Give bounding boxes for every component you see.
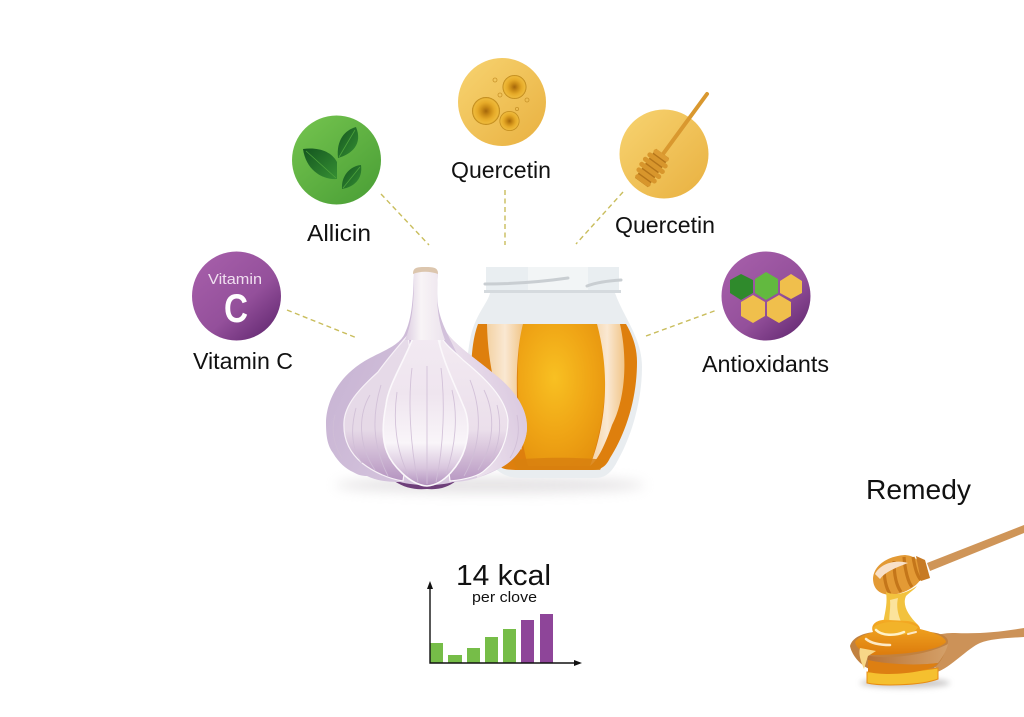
chart subtitle: per clove: per clove — [472, 589, 537, 606]
right middle clove — [440, 335, 508, 481]
spoon handle — [925, 628, 1024, 672]
honey core — [518, 324, 605, 466]
spoon bowl — [850, 632, 948, 671]
connector: Allicin to garlic — [381, 194, 429, 245]
center clove — [383, 333, 468, 486]
label: Allicin: Allicin — [307, 220, 371, 246]
right outer clove — [447, 333, 527, 478]
icon: Allicin leaves — [292, 116, 381, 204]
neck — [405, 269, 445, 340]
spoon front band — [865, 644, 948, 664]
illustration: honey dipper and spoon — [850, 525, 1024, 688]
chart title: 14 kcal: 14 kcal — [456, 560, 551, 592]
spoon shadow — [860, 678, 950, 688]
illustration: garlic bulb — [326, 267, 527, 489]
stem tip — [413, 267, 438, 274]
bulb outline — [326, 268, 527, 485]
ground shadow — [335, 477, 645, 493]
icon: honey dipper circle — [620, 94, 708, 198]
honey bottom — [512, 458, 606, 470]
connector: honey dipper Quercetin to jar — [576, 192, 623, 244]
bottom root — [394, 472, 456, 489]
connector: Quercetin to jar — [504, 190, 506, 245]
dipper head — [873, 555, 930, 595]
label: Antioxidants: Antioxidants — [702, 351, 829, 377]
left middle clove — [344, 335, 415, 481]
label: Remedy: Remedy — [866, 474, 971, 505]
label: Quercetin top: Quercetin — [451, 157, 551, 183]
honey mound — [855, 620, 946, 655]
icon: Vitamin C circle — [192, 252, 281, 340]
illustration: honey jar — [467, 267, 642, 478]
icon: Vitamin C circle: Vitamin — [208, 272, 262, 288]
honey pour over rim — [859, 648, 876, 669]
icon: Vitamin C circle: C — [224, 287, 248, 331]
connector: Antioxidants to jar — [646, 310, 717, 336]
connector: Vitamin C to garlic — [287, 310, 357, 338]
honey fill — [471, 324, 637, 470]
glass highlights — [487, 324, 523, 450]
icon: Antioxidants honeycomb — [722, 252, 810, 340]
icon: Quercetin spheres — [458, 58, 546, 146]
label: Quercetin right: Quercetin — [615, 212, 715, 238]
jar lid — [486, 267, 619, 293]
label: Vitamin C: Vitamin C — [193, 348, 293, 374]
dipper handle — [927, 525, 1024, 571]
honey under spoon — [867, 668, 938, 685]
jar body — [467, 293, 642, 478]
bar chart — [427, 581, 582, 666]
clove ribs — [333, 366, 518, 484]
honey drip — [883, 586, 918, 625]
